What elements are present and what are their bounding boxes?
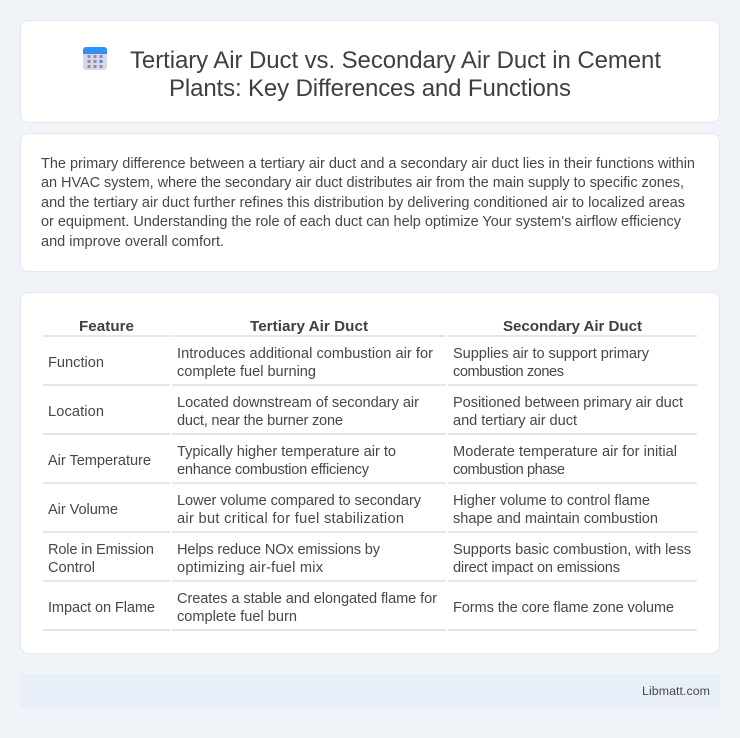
row: impact on flame: Impact on Flame (48, 600, 155, 616)
title: Tertiary Air Duct vs. Secondary Air Duct in Cement (130, 47, 661, 74)
row: impact on flame: Creates a stable and elongated flame for (177, 591, 437, 607)
row: role in emission control: Helps reduce NOx emissions by (177, 542, 381, 558)
row: air volume: shape and maintain combustion (453, 511, 658, 527)
text block: introduction: or equipment. Understanding the role of each duct can help optimize Your system's airflow efficiency (41, 214, 682, 230)
row: function (43, 346, 697, 385)
row: location: and tertiary air duct (453, 413, 577, 429)
footer: Libmatt.com (642, 684, 710, 698)
text block: introduction: and improve overall comfort. (41, 234, 224, 250)
text block: introduction: an HVAC system, where the secondary air duct distributes air from the main supply to specific zones, (41, 175, 684, 191)
row: impact on flame (43, 591, 697, 630)
row: air volume (43, 493, 697, 532)
row: role in emission control: Supports basic combustion, with less (453, 542, 691, 558)
footer (20, 674, 720, 708)
text block: introduction: The primary difference between a tertiary air duct and a secondary air duct lies in their functions within (41, 156, 695, 172)
icon: calendar (83, 47, 107, 70)
row: role in emission control: Role in Emission (48, 542, 154, 558)
title: Plants: Key Differences and Functions (169, 75, 571, 102)
row: air temperature: Moderate temperature air for initial (453, 444, 677, 460)
row: air temperature: Air Temperature (48, 453, 151, 469)
table header (43, 318, 697, 336)
row: air volume: Air Volume (48, 502, 118, 518)
text block: introduction: and the tertiary air duct further refines this distribution by delivering conditioned air to localized areas (41, 195, 685, 211)
row: location: Positioned between primary air duct (453, 395, 683, 411)
row: air temperature: Typically higher temperature air to (177, 444, 396, 460)
row: location: Located downstream of secondary air (177, 395, 419, 411)
row: air volume: air but critical for fuel stabilization (177, 511, 404, 527)
row: air volume: Lower volume compared to secondary (177, 493, 422, 509)
row: role in emission control: direct impact on emissions (453, 560, 620, 576)
row: role in emission control: Control (48, 560, 95, 576)
row: impact on flame: Forms the core flame zone volume (453, 600, 674, 616)
row: location: Location (48, 404, 104, 420)
row: role in emission control: optimizing air-fuel mix (177, 560, 324, 576)
row: function: combustion zones (453, 364, 564, 380)
text block: introduction (41, 156, 695, 250)
row: role in emission control (43, 542, 697, 581)
row: function: Supplies air to support primary (453, 346, 650, 362)
row: function: Function (48, 355, 104, 371)
table header: Secondary Air Duct (503, 318, 642, 335)
row: impact on flame: complete fuel burn (177, 609, 297, 625)
table header: Feature (79, 318, 134, 335)
row: air temperature (43, 444, 697, 483)
row: location (43, 395, 697, 434)
row: function: complete fuel burning (177, 364, 316, 380)
panel: comparison table (20, 292, 720, 654)
row: air temperature: enhance combustion efficiency (177, 462, 370, 478)
row: air volume: Higher volume to control flame (453, 493, 650, 509)
panel: header (20, 20, 720, 122)
row: function: Introduces additional combustion air for (177, 346, 433, 362)
row: air temperature: combustion phase (453, 462, 565, 478)
title (130, 47, 661, 102)
panel: introduction (20, 134, 720, 272)
row: location: duct, near the burner zone (177, 413, 343, 429)
table header: Tertiary Air Duct (250, 318, 368, 335)
